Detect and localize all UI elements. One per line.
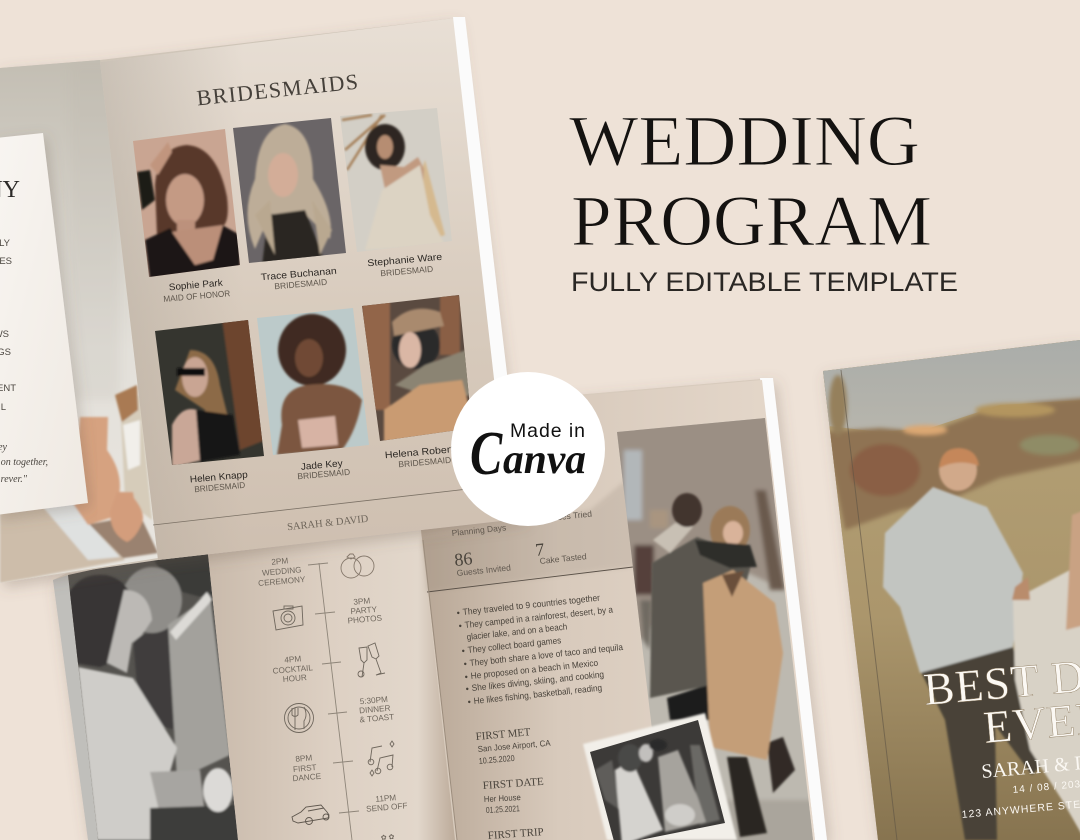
bullet list: He likes fishing, basketball, reading	[473, 683, 603, 706]
stats: Cake Tasted	[539, 551, 587, 566]
icon: dinner plate	[284, 704, 314, 732]
top booklet: bridesmaids	[0, 17, 524, 585]
badge: made in canva	[451, 372, 605, 526]
names and roles: BRIDESMAID	[194, 480, 246, 494]
stats: 86	[453, 548, 473, 570]
timeline labels: FIRST	[293, 763, 317, 774]
names and roles	[163, 252, 459, 494]
inner ceremony card	[0, 133, 88, 515]
photo: Helena Roberts	[362, 295, 470, 441]
heading: BRIDESMAIDS	[195, 69, 359, 110]
milestones: Her House	[484, 792, 521, 804]
inner ceremony card: rever."	[1, 474, 28, 485]
timeline labels: DANCE	[292, 772, 322, 783]
photo: Jade Key	[255, 305, 373, 460]
bullet list: •	[467, 697, 471, 707]
names and roles: BRIDESMAID	[398, 455, 452, 469]
photo: Sophie Park	[133, 129, 240, 277]
timeline labels: SEND OFF	[366, 801, 408, 814]
milestones: FIRST MET	[475, 726, 531, 743]
middle booklet	[53, 378, 827, 840]
photo: Stephanie Ware	[338, 105, 456, 255]
names and roles: Jade Key	[300, 458, 343, 473]
timeline labels: & TOAST	[359, 713, 394, 725]
timeline labels: 4PM	[284, 654, 302, 665]
timeline labels: 2PM	[271, 556, 289, 567]
bullet list: They both share a love of taco and tequila	[469, 642, 623, 668]
milestones: 01.25.2021	[486, 803, 520, 815]
title: WEDDING	[569, 101, 920, 181]
bullet list: They camped in a rainforest, desert, by a	[464, 604, 613, 630]
names and roles: Stephanie Ware	[367, 252, 443, 269]
timeline labels: 5:30PM	[359, 695, 388, 706]
bullet list: They collect board games	[467, 635, 562, 655]
bullet list: glacier lake, and on a beach	[466, 621, 568, 642]
stats: Guests Invited	[456, 562, 512, 578]
footer signature	[153, 485, 503, 533]
timeline labels: WEDDING	[262, 565, 302, 578]
page: story facts	[421, 380, 815, 840]
names and roles: Helena Roberts	[384, 444, 459, 461]
milestones	[475, 726, 551, 840]
timeline labels: 11PM	[375, 793, 397, 804]
bullet list: •	[458, 621, 462, 631]
timeline labels: PHOTOS	[347, 613, 383, 625]
bullet list: He proposed on a beach in Mexico	[470, 658, 599, 681]
bullet list: •	[456, 608, 460, 618]
timeline labels: 3PM	[353, 596, 371, 607]
bullet list: They traveled to 9 countries together	[462, 593, 600, 617]
title: PROGRAM	[571, 181, 932, 261]
names and roles: BRIDESMAID	[380, 264, 434, 278]
bullet list	[456, 593, 623, 707]
bullet list: •	[465, 684, 469, 694]
inner ceremony card: L	[1, 402, 6, 413]
badge: made in canva: C	[470, 419, 503, 488]
inner ceremony card: on together,	[1, 457, 48, 468]
timeline labels: COCKTAIL	[272, 663, 314, 676]
polaroid photo	[583, 713, 737, 840]
icon: camera	[273, 606, 303, 630]
cover booklet: best day ever	[820, 335, 1080, 840]
names and roles: Sophie Park	[168, 278, 223, 293]
names and roles: Trace Buchanan	[260, 266, 337, 283]
photo: Trace Buchanan	[230, 115, 350, 266]
badge: made in canva: Made in	[510, 420, 585, 442]
icon: music notes	[368, 741, 394, 776]
badge: made in canva: anva	[503, 437, 586, 483]
title	[569, 101, 958, 297]
timeline labels: HOUR	[282, 673, 307, 684]
bullet list: She likes diving, skiing, and cooking	[471, 669, 604, 693]
names and roles: MAID OF HONOR	[163, 288, 231, 304]
bullet list: •	[464, 672, 468, 682]
timeline labels: 8PM	[295, 753, 313, 764]
timeline labels	[258, 556, 408, 814]
page edges	[53, 378, 827, 840]
icon: champagne glasses	[358, 643, 385, 677]
bullet list: •	[463, 659, 467, 669]
timeline labels: CEREMONY	[258, 575, 306, 588]
stats	[451, 509, 593, 578]
cover heading	[924, 662, 1080, 818]
timeline labels: DINNER	[359, 704, 391, 715]
icon: rings	[341, 554, 374, 578]
right page	[100, 17, 524, 560]
milestones: FIRST DATE	[482, 776, 544, 792]
bullet list: •	[461, 646, 465, 656]
names and roles: BRIDESMAID	[297, 467, 351, 481]
icon: car	[292, 805, 329, 824]
milestones: San Jose Airport, CA	[477, 738, 551, 754]
subtitle: FULLY EDITABLE TEMPLATE	[571, 267, 958, 297]
photo: black and white couple	[68, 554, 238, 840]
page: timeline	[207, 525, 455, 840]
stats: Dresses Tried	[539, 509, 593, 524]
milestones: 10.25.2020	[478, 753, 515, 766]
stats: Planning Days	[451, 522, 507, 538]
photo: couple hugging	[610, 415, 820, 840]
stats: 7	[534, 539, 545, 560]
photo: Helen Knapp	[155, 320, 264, 465]
names and roles: BRIDESMAID	[274, 277, 328, 291]
timeline labels: PARTY	[350, 605, 378, 616]
left page with vases	[0, 60, 160, 585]
footer signature: SARAH & DAVID	[287, 514, 369, 533]
names and roles: Helen Knapp	[189, 470, 248, 486]
